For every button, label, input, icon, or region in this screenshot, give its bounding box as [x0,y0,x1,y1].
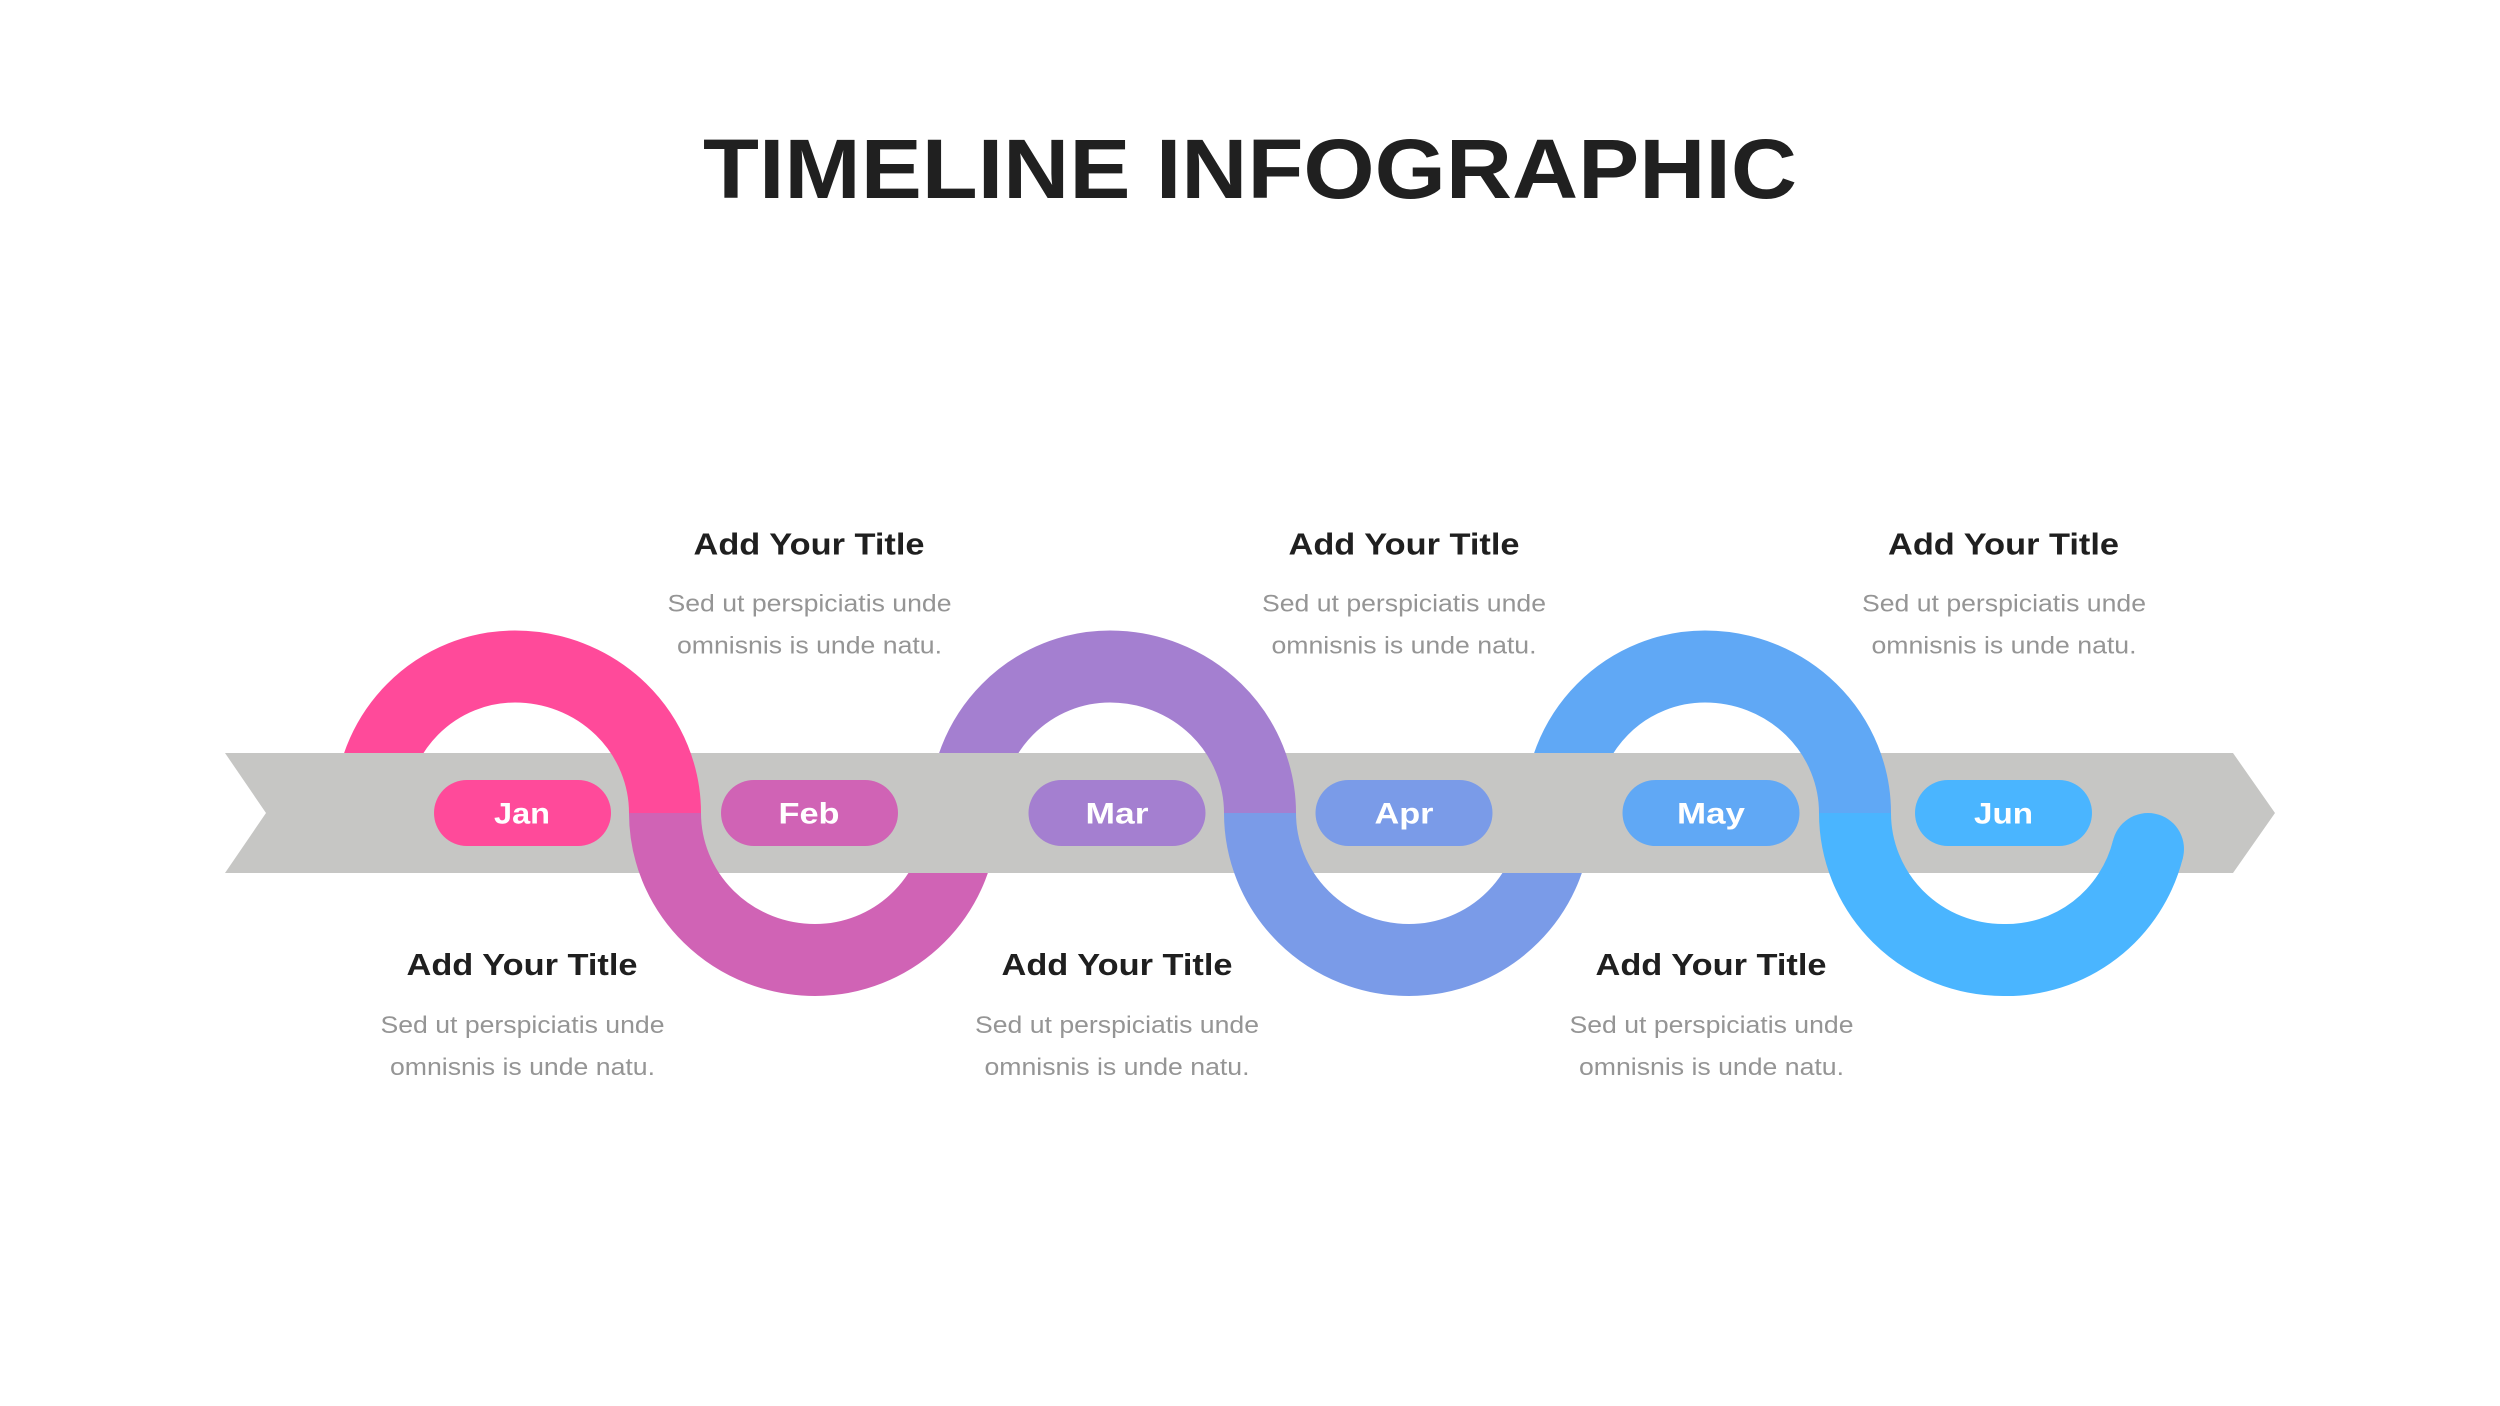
text block: Jun: Add Your Title [1888,526,2119,562]
pill: Apr: Apr [1374,798,1434,830]
text block: Jan [380,947,664,1081]
text block: Jan: omnisnis is unde natu. [390,1054,655,1081]
wave segments passing behind the band [370,666,1705,960]
text block: Apr: omnisnis is unde natu. [1272,632,1536,660]
pill: Feb: Feb [778,798,840,830]
text block: Feb [668,526,952,660]
pill: Jan [434,780,611,846]
text block: Apr [1262,526,1546,660]
pill: Mar [1028,780,1206,846]
arrow band [225,753,2275,873]
end cap [2112,813,2184,885]
text block: Jun: omnisnis is unde natu. [1872,632,2136,660]
text block: Mar: Add Your Title [1002,947,1232,982]
final wave segment with rounded end [1855,813,2148,960]
pill: Mar: Mar [1086,798,1149,830]
pill: Jan: Jan [494,798,550,830]
text block: Feb: Add Your Title [694,526,924,562]
text block: Feb: omnisnis is unde natu. [677,632,942,660]
text block: Jan: Sed ut perspiciatis unde [380,1012,664,1039]
text block: May: Sed ut perspiciatis unde [1570,1012,1854,1039]
pill: Jun: Jun [1974,798,2033,830]
text block: May: Add Your Title [1596,947,1826,982]
text block: Mar: Sed ut perspiciatis unde [975,1012,1259,1039]
pill: Apr [1316,780,1492,846]
text block: Jan: Add Your Title [406,947,638,982]
pill: May [1622,780,1800,846]
text block: Mar [975,947,1259,1081]
pill: May: May [1677,798,1745,830]
pill: Jun [1915,780,2092,846]
text block: May [1570,947,1854,1081]
wave segments passing over the band [514,666,2148,960]
text block: Jun [1862,526,2146,660]
title: TIMELINE INFOGRAPHIC [703,122,1797,216]
text block: Jun: Sed ut perspiciatis unde [1862,590,2146,618]
text block: May: omnisnis is unde natu. [1579,1054,1844,1081]
text block: Apr: Sed ut perspiciatis unde [1262,590,1546,618]
text block: Apr: Add Your Title [1288,526,1520,562]
pill: Feb [721,780,898,846]
text block: Mar: omnisnis is unde natu. [984,1054,1250,1081]
text block: Feb: Sed ut perspiciatis unde [668,590,952,618]
